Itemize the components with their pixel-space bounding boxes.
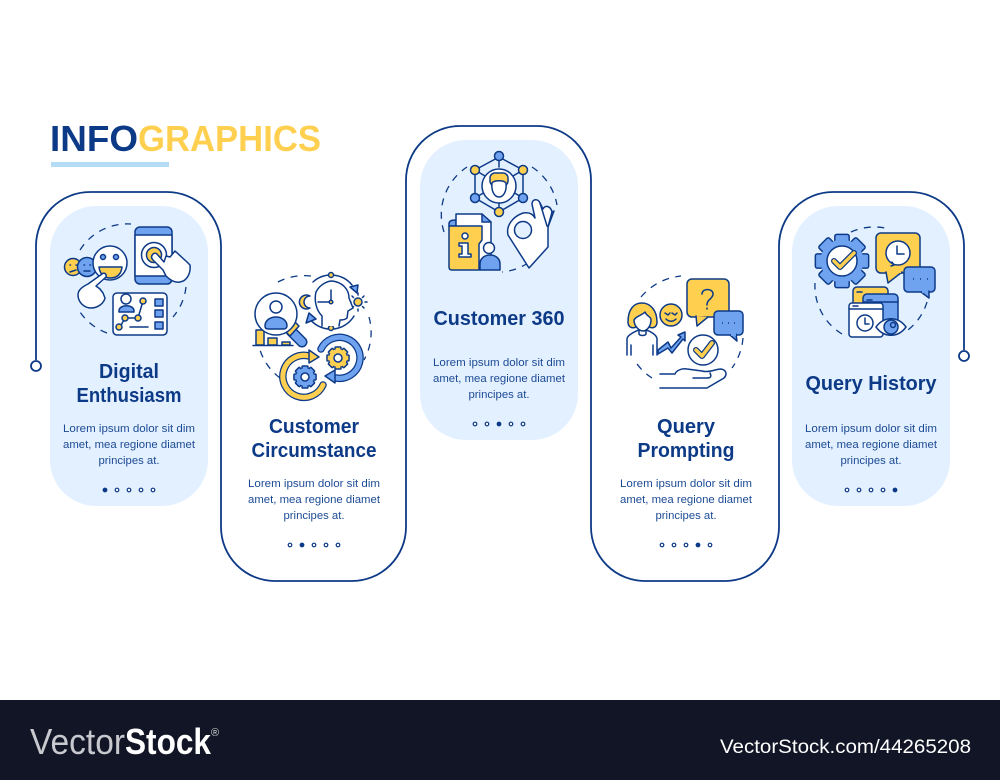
footer bar: Stock [125,721,212,762]
heading: digital enthusiasm: Enthusiasm [76,385,182,407]
text: query history: principes at. [840,455,902,467]
pagination dots 1 [103,488,155,492]
pagination dots 5 [845,488,897,492]
footer bar [0,700,1000,780]
connecting outline [31,126,969,581]
heading: query prompting: Prompting [638,440,734,462]
text: query prompting: Lorem ipsum dolor sit dim [620,478,752,490]
title: INFO [50,118,138,159]
text: customer 360: Lorem ipsum dolor sit dim [433,357,565,369]
heading: query prompting [638,416,734,462]
footer bar: VectorStock.com/44265208 [720,737,971,758]
text: query history [805,423,937,467]
title: GRAPHICS [138,118,321,159]
icon: digital enthusiasm [64,224,190,335]
text: query history: Lorem ipsum dolor sit dim [805,423,937,435]
heading: customer circumstance [252,416,376,462]
text: customer 360 [433,357,565,401]
text: digital enthusiasm [63,423,195,467]
text: digital enthusiasm: Lorem ipsum dolor sit dim [63,423,195,435]
text: query prompting: principes at. [656,510,716,522]
icon: query history [815,227,935,337]
icon: query prompting [627,276,743,388]
text: query history: amet, mea regione diamet [805,439,937,451]
heading: digital enthusiasm [76,361,182,407]
text: customer circumstance: Lorem ipsum dolor sit dim [248,478,380,490]
heading: query history: Query History [806,373,937,395]
footer bar: Vector [30,721,125,762]
icon: customer circumstance [253,272,371,397]
text: query prompting [620,478,752,522]
text: query prompting: amet, mea regione diamet [620,494,752,506]
footer bar: ® [211,727,219,739]
panel backgrounds [50,140,950,506]
title underline [51,162,169,167]
text: digital enthusiasm: principes at. [98,455,160,467]
pagination dots 2 [288,543,340,547]
text: customer circumstance [248,478,380,522]
heading: customer 360: Customer 360 [434,308,564,330]
icon: customer 360 [441,152,557,272]
text: digital enthusiasm: amet, mea regione diamet [63,439,195,451]
pagination dots 3 [473,422,525,426]
heading: customer circumstance: Customer [269,416,359,438]
pagination dots 4 [660,543,712,547]
text: customer 360: amet, mea regione diamet [433,373,565,385]
title [50,118,321,159]
heading: customer circumstance: Circumstance [252,440,376,462]
heading: digital enthusiasm: Digital [99,361,159,383]
text: customer circumstance: principes at. [284,510,344,522]
text: customer 360: principes at. [468,389,530,401]
text: customer circumstance: amet, mea regione diamet [248,494,380,506]
heading: query prompting: Query [657,416,716,438]
